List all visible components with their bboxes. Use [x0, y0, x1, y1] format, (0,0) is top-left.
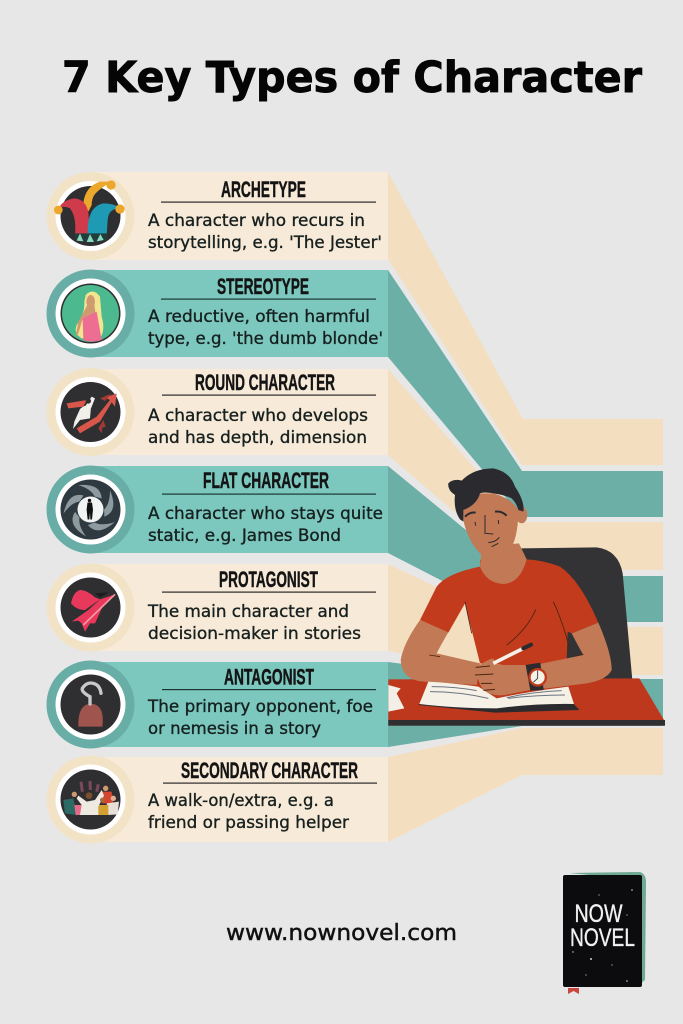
- description: antagonist: The primary opponent, foe: [147, 697, 373, 716]
- icon: blonde woman: [76, 292, 103, 342]
- panel: antagonist: [46, 660, 388, 748]
- icon: figure with rising arrows: [67, 393, 117, 433]
- description: round character: A character who develops: [148, 406, 368, 425]
- panel: antagonist: or nemesis in a story: [148, 719, 321, 738]
- heading: protagonist: PROTAGONIST: [219, 567, 318, 592]
- panel: archetype: [46, 172, 388, 260]
- heading: archetype: ARCHETYPE: [221, 177, 306, 202]
- website url: www.nownovel.com: [226, 921, 457, 946]
- logo: Now Novel book: NOW: [574, 900, 623, 928]
- heading: stereotype: STEREOTYPE: [217, 274, 309, 299]
- panel: archetype: storytelling, e.g. 'The Jester': [148, 233, 382, 252]
- description: protagonist: The main character and: [147, 602, 349, 621]
- panel: secondary character: [46, 756, 388, 844]
- perspective rays leading to the right-hand strips: [388, 172, 663, 842]
- icon: jester hat: [54, 180, 125, 242]
- description: secondary character: A walk-on/extra, e.g. a: [148, 791, 334, 810]
- heading: antagonist: ANTAGONIST: [224, 664, 314, 690]
- description: stereotype: A reductive, often harmful: [148, 307, 370, 326]
- icon: gun-barrel spiral with silhouette: [64, 479, 121, 537]
- heading: secondary character: SECONDARY CHARACTER: [181, 758, 358, 783]
- logo: Now Novel book: NOVEL: [570, 924, 635, 952]
- description: archetype: A character who recurs in: [148, 211, 365, 230]
- heading: flat character: FLAT CHARACTER: [203, 468, 329, 493]
- icon: flying hero with cape: [71, 590, 115, 632]
- panel: round character: [46, 368, 388, 456]
- panel: round character: and has depth, dimension: [148, 428, 367, 447]
- panel: protagonist: decision-maker in stories: [148, 624, 361, 643]
- panel: flat character: static, e.g. James Bond: [148, 526, 341, 545]
- heading: round character: ROUND CHARACTER: [195, 370, 335, 395]
- logo: Now Novel book: [563, 872, 646, 994]
- title: 7 Key Types of Character: [62, 53, 643, 103]
- description: flat character: A character who stays quite: [148, 504, 383, 523]
- panel: stereotype: [46, 270, 388, 358]
- panel: flat character: [46, 466, 388, 554]
- panel: secondary character: friend or passing helper: [148, 813, 349, 832]
- panel: protagonist: [46, 564, 388, 652]
- icon: pirate hook: [78, 683, 103, 727]
- icon: crowd of people: [63, 781, 119, 815]
- panel: stereotype: type, e.g. 'the dumb blonde': [148, 329, 383, 348]
- illustration: man writing at desk: [388, 468, 665, 726]
